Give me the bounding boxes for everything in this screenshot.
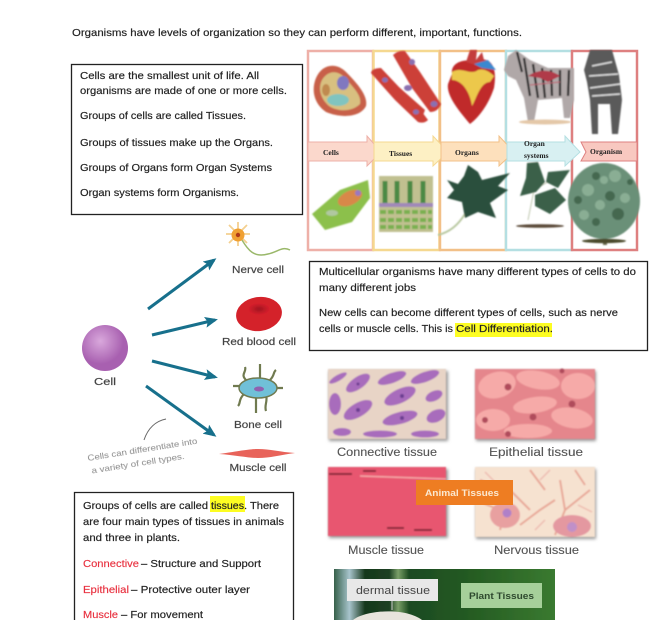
image: muscle tissue: [328, 467, 448, 538]
icon: animal cell: [314, 66, 366, 116]
panel: levels of organization text: Groups of tissues make up the Organs.: [80, 137, 273, 149]
label: nervous tissue: Nervous tissue: [494, 545, 579, 557]
arrow band: levels: Tissues: [389, 149, 412, 158]
panel: cell differentiation text: many different jobs: [319, 282, 416, 294]
panel: cell differentiation text: New cells can become different types of cells, such as nerve: [319, 307, 618, 319]
label: bone cell: Bone cell: [234, 419, 282, 431]
title: Organisms have levels of organization so they can perform different, important, functions.: [72, 27, 522, 39]
label: muscle cell: Muscle cell: [230, 462, 286, 474]
panel: levels of organization diagram: [308, 50, 640, 250]
icon: red blood cell: [234, 294, 284, 334]
icon: curved pointer: [144, 419, 166, 440]
icon: zebra organism: [584, 50, 622, 134]
icon: muscle fibers: [371, 51, 441, 123]
arrow band: levels: systems: [524, 151, 549, 160]
arrow band: levels: Organism: [590, 147, 623, 156]
badge: animal tissues: [416, 480, 513, 505]
icon: leaf: [438, 165, 510, 235]
caption: Cells can differentiate into: [87, 436, 198, 463]
panel: levels of organization text: Groups of cells are called Tissues.: [80, 110, 246, 122]
panel: tissues text: Connective: [83, 558, 139, 570]
label: epithelial tissue: Epithelial tissue: [489, 447, 583, 459]
panel: tissues text: – Structure and Support: [141, 558, 261, 570]
panel: levels of organization text: organisms are made of one or more cells.: [80, 85, 287, 97]
icon: stem cell: [82, 325, 128, 371]
icon: zebra organ system: [504, 50, 574, 124]
panel: cell differentiation text: cells or muscle cells. This is: [319, 323, 453, 335]
label: muscle tissue: Muscle tissue: [348, 545, 424, 557]
panel: cell differentiation text: Cell Differentiation.: [456, 323, 553, 335]
panel: tissues text: . There: [244, 500, 279, 512]
label: dermal tissue: dermal tissue: [356, 585, 430, 597]
panel: levels of organization text: Cells are the smallest unit of life. All: [80, 70, 259, 82]
label: dermal tissue: [347, 579, 438, 601]
panel: tissues text: [74, 492, 294, 620]
panel: tissues text: tissues: [211, 500, 244, 512]
icon: plant tissue block: [379, 176, 433, 232]
icon: tree: [568, 163, 640, 245]
label: nerve cell: Nerve cell: [232, 264, 284, 276]
caption: [87, 436, 200, 476]
panel: tissues text: Groups of cells are called: [83, 500, 208, 512]
icon: heart: [448, 50, 496, 124]
arrow band: levels: [308, 136, 637, 166]
panel: tissues text: Epithelial: [83, 584, 129, 596]
arrow band: levels: Cells: [323, 148, 339, 157]
image: nervous tissue: [475, 467, 596, 539]
image: connective tissue: [328, 367, 448, 441]
image: plant tissue: [334, 569, 555, 620]
icon: muscle cell: [219, 449, 295, 458]
arrows: [146, 260, 215, 435]
panel: levels of organization text: Groups of Organs form Organ Systems: [80, 162, 272, 174]
badge: animal tissues: Animal Tissues: [425, 488, 499, 499]
label: cell: Cell: [94, 376, 116, 388]
panel: tissues text: and three in plants.: [83, 532, 180, 544]
caption: a variety of cell types.: [91, 451, 185, 476]
icon: plant organ system: [516, 162, 570, 228]
panel: levels of organization text: [72, 64, 302, 214]
badge: plant tissues: Plant Tissues: [469, 591, 534, 602]
icon: bone cell: [233, 364, 283, 413]
chart: cell differentiation: [82, 222, 296, 476]
panel: cell differentiation text: Multicellular organisms have many different types of cells to do: [319, 266, 636, 278]
panel: tissues text: are four main types of tissues in animals: [83, 516, 284, 528]
arrow band: levels: Organ: [524, 139, 546, 148]
panel: tissues text: – Protective outer layer: [131, 584, 251, 596]
image: epithelial tissue: [475, 367, 596, 441]
label: red blood cell: Red blood cell: [222, 336, 296, 348]
panel: cell differentiation text: [310, 262, 648, 350]
panel: levels of organization text: Organ systems form Organisms.: [80, 187, 239, 199]
label: connective tissue: Connective tissue: [337, 447, 437, 459]
icon: nerve cell: [226, 222, 290, 255]
arrow band: levels: Organs: [455, 148, 479, 157]
icon: plant cell: [312, 180, 370, 230]
badge: plant tissues: [461, 583, 542, 608]
column frames: [308, 51, 637, 250]
